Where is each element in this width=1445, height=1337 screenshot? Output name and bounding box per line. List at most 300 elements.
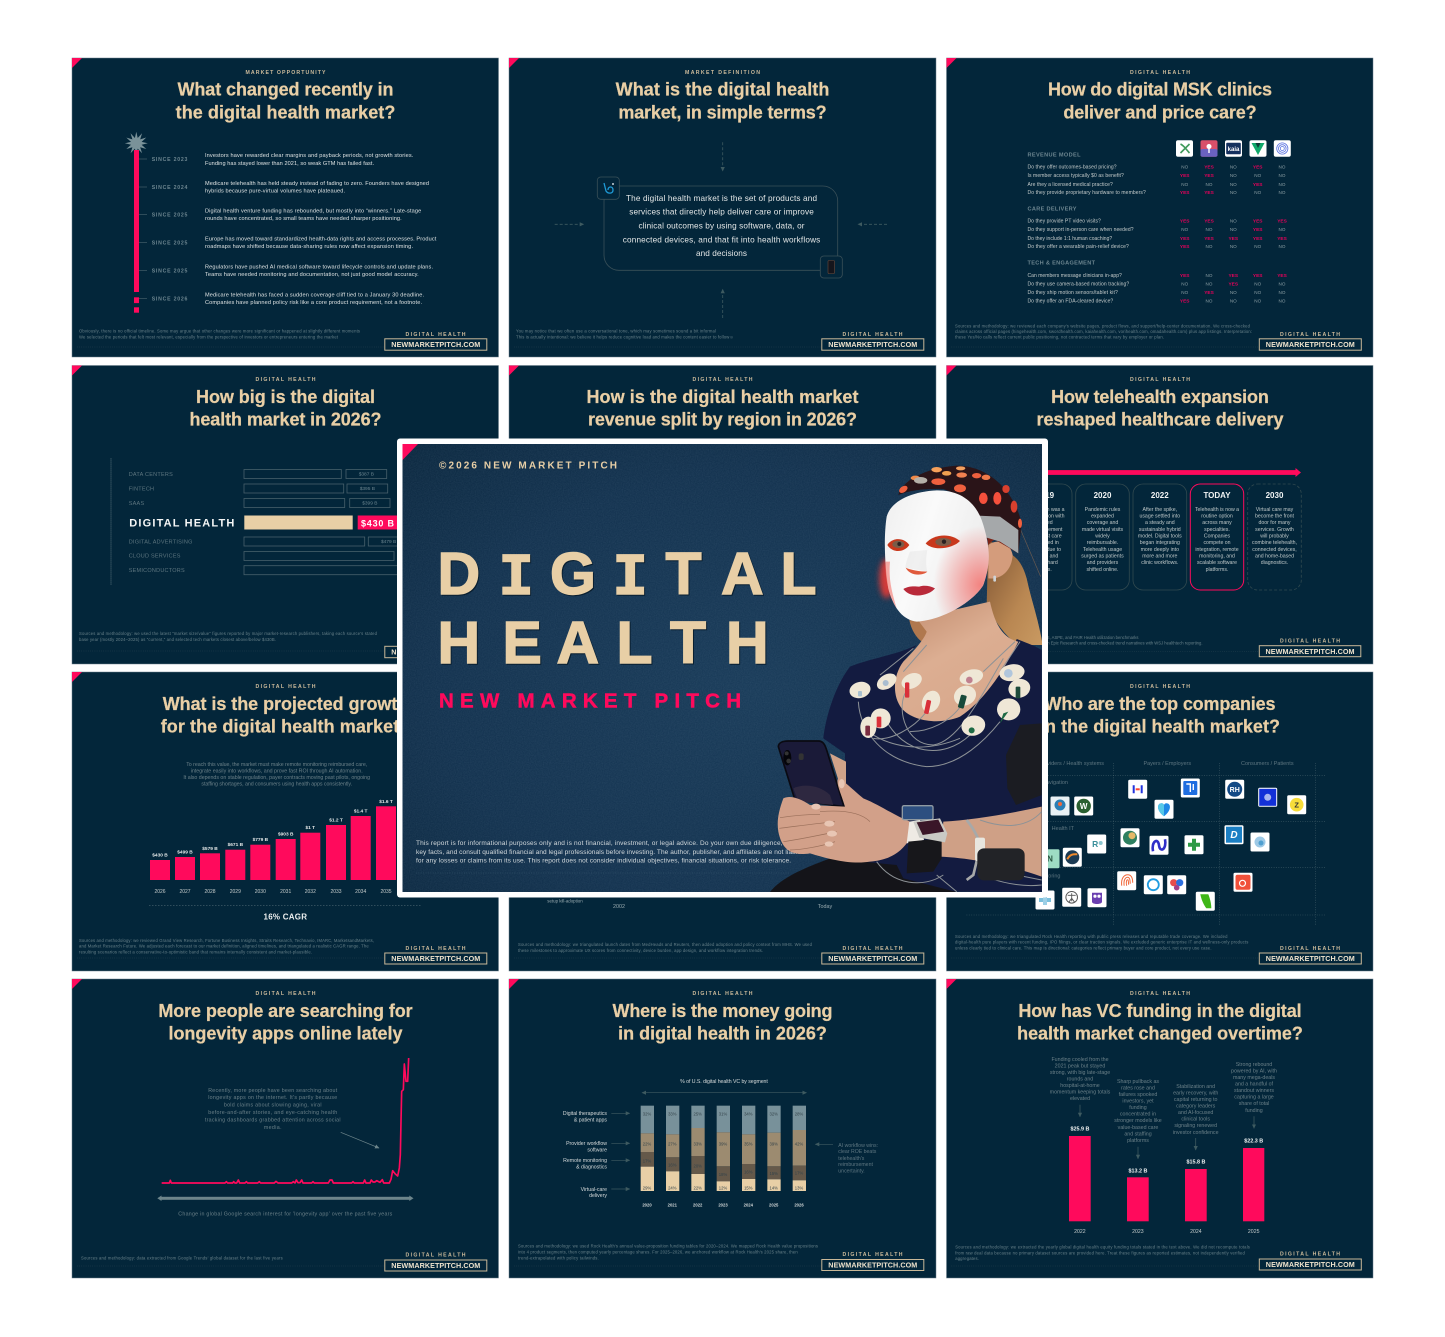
title xyxy=(586,387,858,430)
table: tech and engagement: YES xyxy=(1277,273,1288,279)
card: 2022 xyxy=(1133,484,1187,590)
footnote: Sources and methodology: we reviewed each company's website pages, product flows, and support/help-center documentation. We cross-checked xyxy=(955,323,1251,328)
arrow: left xyxy=(555,223,584,225)
logo tile xyxy=(1150,836,1168,855)
bar chart: market sizes: $479 B xyxy=(381,539,396,545)
column and row headings: Consumers / Patients xyxy=(1241,761,1294,767)
timeline descriptions: Europe has moved toward standardized health-data rights and access processes. Product xyxy=(205,237,437,243)
definition text: connected devices, and that fit into health workflows xyxy=(623,235,820,244)
year labels: 2026 xyxy=(794,1202,804,1208)
logo tile xyxy=(1167,875,1186,894)
table: care delivery: YES xyxy=(1180,236,1190,242)
logo tile: Z xyxy=(1294,800,1299,809)
footnote xyxy=(955,934,1248,950)
timeline descriptions: Funding has stayed lower than 2021, so weak GTM has failed fast. xyxy=(205,161,374,167)
cover title: I xyxy=(612,545,648,612)
card: 2022: 2022 xyxy=(1151,491,1169,500)
bar chart: funding: $22.3 B xyxy=(1244,1138,1263,1144)
card: 2020: coverage and xyxy=(1087,520,1118,526)
title: health market in 2026? xyxy=(190,410,382,430)
title: What is the projected growth xyxy=(163,694,408,714)
corner accent xyxy=(72,366,82,376)
footer brand: DIGITAL HEALTH xyxy=(842,332,903,338)
annotation arrows xyxy=(1080,1105,1254,1159)
bar values: 18% xyxy=(719,1172,727,1177)
footer brand: NEWMARKETPITCH.COM xyxy=(828,1261,917,1270)
annotation: 2024: early recovery, with xyxy=(1173,1090,1218,1096)
icon: stethoscope xyxy=(597,177,619,199)
bar chart: funding: $25.9 B xyxy=(1070,1126,1089,1132)
logo tile xyxy=(1117,871,1136,890)
logo tile xyxy=(1050,796,1070,816)
table: tech and engagement: NO xyxy=(1279,290,1286,295)
table: care delivery: NO xyxy=(1254,244,1262,249)
table: revenue model: NO xyxy=(1279,182,1286,187)
table: care delivery: YES xyxy=(1253,236,1263,242)
table: revenue model: NO xyxy=(1181,182,1189,187)
logo tile xyxy=(1225,780,1244,799)
explanatory text: staffing shortages, and consumers using health apps consistently. xyxy=(201,781,352,787)
title: How telehealth expansion xyxy=(1051,387,1269,407)
title: health market changed overtime? xyxy=(1017,1024,1303,1044)
table: tech and engagement: NO xyxy=(1230,298,1237,304)
explanatory text xyxy=(205,1088,341,1131)
cover title xyxy=(438,541,817,676)
column and row headings xyxy=(1029,761,1294,879)
logo tile xyxy=(1062,888,1081,907)
bar values: 17% xyxy=(795,1170,803,1176)
footnote: Sources and methodology: we triangulated Rock Health reporting with public press releases and reputable trade coverage. We included xyxy=(955,934,1228,939)
icon: starburst xyxy=(125,132,148,155)
annotation: 2022: strong, with big late-stage xyxy=(1050,1070,1110,1076)
title: reshaped healthcare delivery xyxy=(1036,410,1284,430)
bar chart: forecast: 2030 xyxy=(255,889,266,895)
timeline descriptions: Digital health venture funding has rebounded, but mostly into “winners.” Late-stage xyxy=(205,209,421,215)
card: 2019: policy hard xyxy=(1033,560,1058,566)
logo: hinge xyxy=(1176,140,1193,157)
card: 2019: limited xyxy=(1038,520,1053,526)
annotation: 2023: rates rose and xyxy=(1121,1085,1155,1091)
bar chart: forecast: $1 T xyxy=(305,825,315,831)
explanatory text: Recently, more people have been searching about xyxy=(208,1088,338,1094)
table: revenue model: NO xyxy=(1206,182,1213,187)
card: 2019: Telehealth was a xyxy=(1026,507,1065,513)
title: What is the digital health xyxy=(616,80,829,100)
bar values: 34% xyxy=(744,1112,753,1116)
logo: omada xyxy=(1274,140,1291,157)
bar values: 24% xyxy=(668,1186,677,1190)
card: 2030: and home-based xyxy=(1255,554,1294,560)
bar chart: forecast: $671 B xyxy=(228,842,244,848)
footer brand xyxy=(822,332,924,350)
cover title: L xyxy=(616,610,653,676)
bar values: 28% xyxy=(795,1112,803,1116)
card: today: integration, remote xyxy=(1195,547,1239,553)
table: care delivery: YES xyxy=(1253,218,1263,224)
footer brand: NEWMARKETPITCH.COM xyxy=(391,648,480,656)
logo: kaia: kaia xyxy=(1228,147,1240,153)
bar chart: market sizes: DATA CENTERS xyxy=(129,472,173,478)
footer brand xyxy=(822,1252,924,1270)
footnote: claims across official pages (hingehealth.com, swordhealth.com, kaiahealth.com, vorihealth.com, omadahealth.com) plus app listings. Interpretation: xyxy=(955,329,1252,334)
arrow: right xyxy=(858,223,887,225)
annotation: 2022: hospital-at-home xyxy=(1060,1083,1100,1089)
footnote: This is actually intentional: we believe it helps reduce cognitive load and makes the content easier to follow☺ xyxy=(516,334,734,339)
panel: VC funding over time xyxy=(946,979,1373,1278)
table: tech and engagement: NO xyxy=(1206,273,1213,278)
year labels: 2024 xyxy=(744,1202,754,1208)
table: revenue model xyxy=(1028,152,1286,196)
title xyxy=(176,80,395,122)
bar chart: forecast: $903 B xyxy=(278,831,294,837)
cover title: H xyxy=(438,610,480,676)
bar chart: market sizes: SEMICONDUCTORS xyxy=(129,568,185,574)
disclaimer: key facts, and consult qualified financial and legal professionals before investing. The author, publisher, and affiliates are not liable xyxy=(416,849,801,856)
timeline descriptions: Medicare telehealth has held steady instead of fading to zero. Founders have designed xyxy=(205,181,429,187)
footer brand: NEWMARKETPITCH.COM xyxy=(1266,1260,1355,1269)
axis labels: 2002 xyxy=(613,904,625,910)
footer brand xyxy=(385,332,487,350)
timeline descriptions: rounds have concentrated, so small teams have needed sharper positioning. xyxy=(205,216,402,222)
title: Where is the money going xyxy=(612,1001,832,1021)
card: today: Telehealth is now a xyxy=(1195,507,1239,513)
table: revenue model: Are they a licensed medical practice? xyxy=(1028,182,1113,188)
kicker: DIGITAL HEALTH xyxy=(256,991,316,997)
cover title: A xyxy=(721,541,764,607)
card: 2020: expanded xyxy=(1091,514,1114,520)
annotation: uncertainty. xyxy=(838,1169,865,1175)
title: longevity apps online lately xyxy=(168,1024,402,1044)
footnote xyxy=(79,329,360,339)
bar values: 31% xyxy=(719,1112,727,1116)
table: revenue model: YES xyxy=(1180,173,1190,179)
segment labels: & patient apps xyxy=(574,1118,607,1124)
bar chart: forecast: 2028 xyxy=(204,889,216,895)
corner accent xyxy=(946,366,956,376)
table: tech and engagement: YES xyxy=(1180,273,1190,279)
annotation: 2022: momentum keeping totals xyxy=(1050,1090,1111,1096)
bar values: 15% xyxy=(744,1186,753,1190)
table: tech and engagement: Do they offer an FDA-cleared device? xyxy=(1028,298,1113,304)
card: 2022: clinic workflows. xyxy=(1141,560,1178,566)
footer brand: DIGITAL HEALTH xyxy=(1280,638,1340,644)
annotation: 2025: many mega-deals xyxy=(1233,1075,1275,1081)
card: 2022: sustainable hybrid xyxy=(1139,527,1181,533)
bar chart: market sizes: DIGITAL HEALTH xyxy=(129,518,234,530)
panel: MSK comparison table xyxy=(946,58,1373,357)
footnote: Sources and methodology: we used Rock Health's annual value-proposition funding tables for 2020–2024. We mapped Rock Health value propositions xyxy=(518,1244,818,1249)
title xyxy=(1040,694,1280,736)
table: revenue model: YES xyxy=(1253,164,1263,170)
table: care delivery: NO xyxy=(1230,218,1237,224)
footnote xyxy=(79,631,378,642)
corner accent xyxy=(946,58,956,68)
table: care delivery: YES xyxy=(1253,227,1263,233)
card: today: compete on xyxy=(1203,540,1231,546)
footer brand xyxy=(1259,1252,1361,1270)
table: care delivery: YES xyxy=(1277,218,1288,224)
bar chart: market sizes: SAAS xyxy=(129,501,144,507)
footnote: Obviously, there is no official timeline. Some may argue that other changes were more significant or happened at slightly different moments xyxy=(79,329,360,334)
logo: vori xyxy=(1250,140,1266,157)
table: revenue model: NO xyxy=(1181,164,1189,170)
table: care delivery: NO xyxy=(1230,244,1237,249)
annotation: clear ROE beats xyxy=(838,1149,877,1155)
table: tech and engagement: TECH & ENGAGEMENT xyxy=(1028,261,1096,267)
footnote: these milestones to approximate UX scores from connectivity, device burden, app design, and workflow integration trends. xyxy=(518,948,763,953)
table: tech and engagement: Do they use camera-based motion tracking? xyxy=(1028,282,1129,288)
bar chart: forecast: 2032 xyxy=(305,889,316,895)
table: revenue model: YES xyxy=(1180,190,1190,196)
cover subtitle: NEW MARKET PITCH xyxy=(439,689,741,712)
footnote: and Market Research Future. We adjusted each forecast to our market definition, aligned timelines, and triangulated a realistic CAGR range. The xyxy=(79,944,369,949)
explanatory text: before-and-after stories, and eye-catching health xyxy=(208,1110,337,1116)
footer brand xyxy=(1259,946,1361,964)
footnote: Sources and methodology: we used CMS, ASPE, and FAIR Health utilization benchmarks xyxy=(973,635,1138,640)
card: today: Companies xyxy=(1204,534,1231,540)
table: revenue model: YES xyxy=(1253,182,1263,188)
bar chart: forecast: 2035 xyxy=(380,889,392,895)
card: 2019: person due to xyxy=(1029,547,1061,553)
annotation: 2022: Funding cooled from the xyxy=(1051,1057,1109,1063)
bar values: 33% xyxy=(668,1112,677,1116)
timeline descriptions: Companies have planned policy risk like a core product requirement, not a footnote. xyxy=(205,300,422,306)
bar chart: forecast: $1.4 T xyxy=(354,808,368,814)
card: 2019: 2019 xyxy=(1036,491,1055,500)
cover title: G xyxy=(550,541,596,607)
bar values: 15% xyxy=(770,1171,778,1176)
segment labels xyxy=(563,1111,607,1199)
CAGR label: 16% CAGR xyxy=(264,912,307,922)
footnote xyxy=(518,942,813,953)
table: revenue model: Do they offer outcomes-based pricing? xyxy=(1028,164,1117,170)
bar values: 12% xyxy=(719,1186,727,1190)
logo tile xyxy=(1036,890,1054,910)
corner accent xyxy=(946,672,956,682)
corner accent xyxy=(946,979,956,989)
footnote: You may notice that we often use a conversational tone, which may sometimes sound a bit informal xyxy=(516,329,716,334)
logo tile xyxy=(1040,849,1060,868)
title xyxy=(612,1001,832,1044)
footer brand: DIGITAL HEALTH xyxy=(1280,332,1340,338)
card: 2022: a steady and xyxy=(1145,520,1175,526)
table: tech and engagement: NO xyxy=(1181,282,1189,286)
logo tile xyxy=(1181,778,1200,798)
card: 2030: services. Growth xyxy=(1255,527,1294,533)
bar chart: forecast: $1.2 T xyxy=(329,818,343,824)
card: 2019: limits. xyxy=(1039,567,1052,573)
bar chart: market sizes: DIGITAL ADVERTISING xyxy=(129,539,193,545)
card: today: platforms. xyxy=(1206,567,1228,573)
logo tile xyxy=(1074,796,1093,816)
table: tech and engagement: NO xyxy=(1279,282,1286,286)
table: revenue model: YES xyxy=(1204,164,1215,170)
table: tech and engagement: NO xyxy=(1254,298,1262,304)
annotation: 2023: and staffing xyxy=(1124,1131,1152,1137)
copyright line: ©2026 NEW MARKET PITCH xyxy=(439,461,617,472)
bar chart: forecast: 2031 xyxy=(280,889,291,895)
bar chart: funding: 2024 xyxy=(1190,1229,1202,1235)
bar chart: funding: 2025 xyxy=(1248,1229,1260,1235)
footer brand: NEWMARKETPITCH.COM xyxy=(391,954,480,963)
panel: adoption chart xyxy=(509,672,936,971)
annotation: 2025: standout winners xyxy=(1234,1088,1274,1094)
timeline labels xyxy=(152,157,188,302)
bar chart: forecast xyxy=(150,799,396,895)
annotation: 2023 xyxy=(1114,1079,1162,1144)
bar values: 29% xyxy=(643,1186,651,1190)
footer brand: NEWMARKETPITCH.COM xyxy=(828,954,917,963)
definition text xyxy=(623,194,820,258)
logo tile xyxy=(1250,832,1270,852)
card: 2030 xyxy=(1248,484,1301,590)
cover card xyxy=(397,438,1048,898)
corner accent xyxy=(72,58,82,68)
bar chart: funding xyxy=(1069,1126,1264,1235)
annotation: AI workflow wins: xyxy=(838,1143,878,1149)
table: care delivery: NO xyxy=(1230,227,1237,232)
card: 2020: and providers xyxy=(1087,560,1119,566)
axis: time span arrow xyxy=(157,1196,414,1201)
photo: woman wearing LED mask and sensors xyxy=(770,466,1043,892)
bar values: 39% xyxy=(770,1142,778,1146)
footnote: Sources and methodology: data extracted from Google Trends' global dataset for the last five years xyxy=(81,1255,283,1260)
table: revenue model: Do they provide proprietary hardware to members? xyxy=(1028,190,1146,196)
footer brand: DIGITAL HEALTH xyxy=(406,946,466,952)
panel: revenue by region xyxy=(509,366,936,664)
corner accent xyxy=(509,979,519,989)
title: More people are searching for xyxy=(158,1001,413,1021)
timeline labels: SINCE 2024 xyxy=(152,185,188,191)
logo tile xyxy=(1224,825,1244,844)
card: 2022: began integrating xyxy=(1140,540,1180,546)
footnote: Sources and methodology: we triangulated launch dates from MedHeads and Reuters, then added adoption and policy context from MHS. We used xyxy=(518,942,813,947)
year labels: 2022 xyxy=(693,1202,703,1208)
logo tile xyxy=(1120,828,1140,847)
segment labels: Remote monitoring xyxy=(563,1158,607,1164)
cover title: D xyxy=(438,541,480,607)
footer brand: DIGITAL HEALTH xyxy=(842,946,903,952)
arrow: top xyxy=(722,142,724,171)
annotation: 2023: value-based care xyxy=(1118,1125,1158,1131)
timeline descriptions: roadmaps have shifted because data-sharing rules now affect expansion timing. xyxy=(205,244,413,250)
icon: phone xyxy=(820,256,842,278)
column and row headings: Providers / Health systems xyxy=(1039,761,1104,767)
panel: what changed recently xyxy=(72,58,498,357)
disclaimer xyxy=(416,840,802,864)
card: today: monitoring, and xyxy=(1199,554,1235,560)
table: tech and engagement: YES xyxy=(1253,273,1263,279)
footnote xyxy=(955,323,1252,340)
bar chart: market sizes: $399 B xyxy=(362,501,377,507)
year labels: 2023 xyxy=(718,1202,728,1208)
table: revenue model: NO xyxy=(1230,173,1237,178)
panel: projected growth xyxy=(72,672,498,971)
annotation: 2022: 2021 peak but stayed xyxy=(1055,1063,1105,1069)
bar values: 20% xyxy=(694,1164,702,1168)
timeline labels: SINCE 2023 xyxy=(152,157,188,163)
annotation: 2024: capital returning to xyxy=(1174,1097,1218,1103)
table: care delivery: YES xyxy=(1277,236,1288,242)
annotation: 2025: powered by AI, with xyxy=(1231,1068,1277,1074)
footnote: base year (mostly 2024–2025) as "current," and selected tech markets closest above/below $430B. xyxy=(79,637,276,642)
table: revenue model: NO xyxy=(1279,173,1286,178)
footer brand xyxy=(385,946,487,964)
footer brand: DIGITAL HEALTH xyxy=(406,332,466,338)
bar chart: funding: $13.2 B xyxy=(1128,1168,1147,1174)
timeline descriptions: Medicare telehealth has faced a sudden coverage cliff tied to a January 30 deadline. xyxy=(205,293,424,299)
corner accent xyxy=(402,444,418,460)
caption: Change in global Google search interest for 'longevity app' over the past five years xyxy=(178,1212,393,1218)
table: tech and engagement: NO xyxy=(1206,282,1213,286)
axis labels xyxy=(547,898,832,910)
card: 2030: Virtual care may xyxy=(1256,507,1294,513)
table: tech and engagement: NO xyxy=(1181,290,1189,295)
timeline descriptions: hybrids because pure-virtual volumes have plateaued. xyxy=(205,189,345,195)
bar chart: funding: $15.8 B xyxy=(1186,1160,1205,1166)
table: tech and engagement: NO xyxy=(1279,298,1286,304)
logo tile xyxy=(1287,795,1306,814)
column and row headings: Payers / Employers xyxy=(1143,761,1191,767)
title xyxy=(616,80,829,122)
explanatory text: longevity apps on the internet. It's partly because xyxy=(208,1095,337,1101)
annotation: 2024: Stabilization and xyxy=(1176,1084,1215,1090)
logo tile xyxy=(1196,892,1215,911)
card: today: specialties. xyxy=(1204,527,1230,533)
year labels: 2020 xyxy=(642,1202,652,1208)
table: revenue model: REVENUE MODEL xyxy=(1028,152,1081,158)
footer brand: NEWMARKETPITCH.COM xyxy=(828,340,917,349)
panel: market definition xyxy=(509,58,936,357)
annotation: 2023: concentrated in xyxy=(1120,1112,1156,1118)
title: How is the digital health market xyxy=(586,387,858,407)
card: 2020: shifted online. xyxy=(1086,567,1119,573)
footnote: trend-extrapolated with policy tailwinds. xyxy=(518,1256,599,1261)
bar chart: forecast: 2029 xyxy=(230,889,241,895)
timeline bar xyxy=(134,150,139,313)
table: care delivery: Do they include 1:1 human coaching? xyxy=(1028,236,1112,242)
disclaimer: for any losses or claims from its use. This report does not consider individual objectives, financial situations, or risk tolerance. xyxy=(416,858,791,864)
annotation: 2023: stronger models like xyxy=(1114,1118,1162,1124)
footnote xyxy=(79,938,374,954)
annotation: 2024: clinical tools xyxy=(1181,1117,1210,1123)
card: 2020: reimbursable. xyxy=(1087,540,1118,546)
title xyxy=(1048,80,1272,122)
bar chart: market sizes: FINTECH xyxy=(129,486,154,492)
annotation: 2025: and a handful of xyxy=(1235,1082,1274,1088)
card: today: TODAY xyxy=(1203,491,1231,500)
corner accent xyxy=(509,672,519,682)
footnote: resulting scenarios reflect a conservative-to-optimistic band that remains internally consistent and market-plausible. xyxy=(79,949,312,954)
bar values: 22% xyxy=(694,1186,702,1190)
explanatory text: integrate easily into workflows, and prove fast ROI through AI automation. xyxy=(191,768,363,774)
table: care delivery: NO xyxy=(1181,227,1189,232)
kicker: DIGITAL HEALTH xyxy=(1130,377,1190,383)
footer brand: DIGITAL HEALTH xyxy=(406,1253,466,1259)
cover title: A xyxy=(556,610,599,676)
disclaimer: This report is for informational purposes only and is not financial, investment, or legal advice. Do your own due diligence, verify xyxy=(416,840,802,847)
card: 2022: model. Digital tools xyxy=(1138,534,1182,540)
kicker: DIGITAL HEALTH xyxy=(692,991,753,997)
panel: top companies map xyxy=(946,672,1373,971)
table: care delivery: YES xyxy=(1204,236,1215,242)
corner accent xyxy=(72,672,82,682)
footnote: We selected the periods that felt most relevant, especially from the perspective of investors or entrepreneurs entering the market xyxy=(79,334,339,339)
footnote: Sources and methodology: we reviewed Grand View Research, Fortune Business Insights, Straits Research, Technavio, IMARC, MarketsandMarkets, xyxy=(79,938,374,943)
bar chart: market sizes xyxy=(129,470,409,575)
card: 2030: connected devices, xyxy=(1252,547,1297,553)
bar values: 22% xyxy=(643,1142,651,1146)
